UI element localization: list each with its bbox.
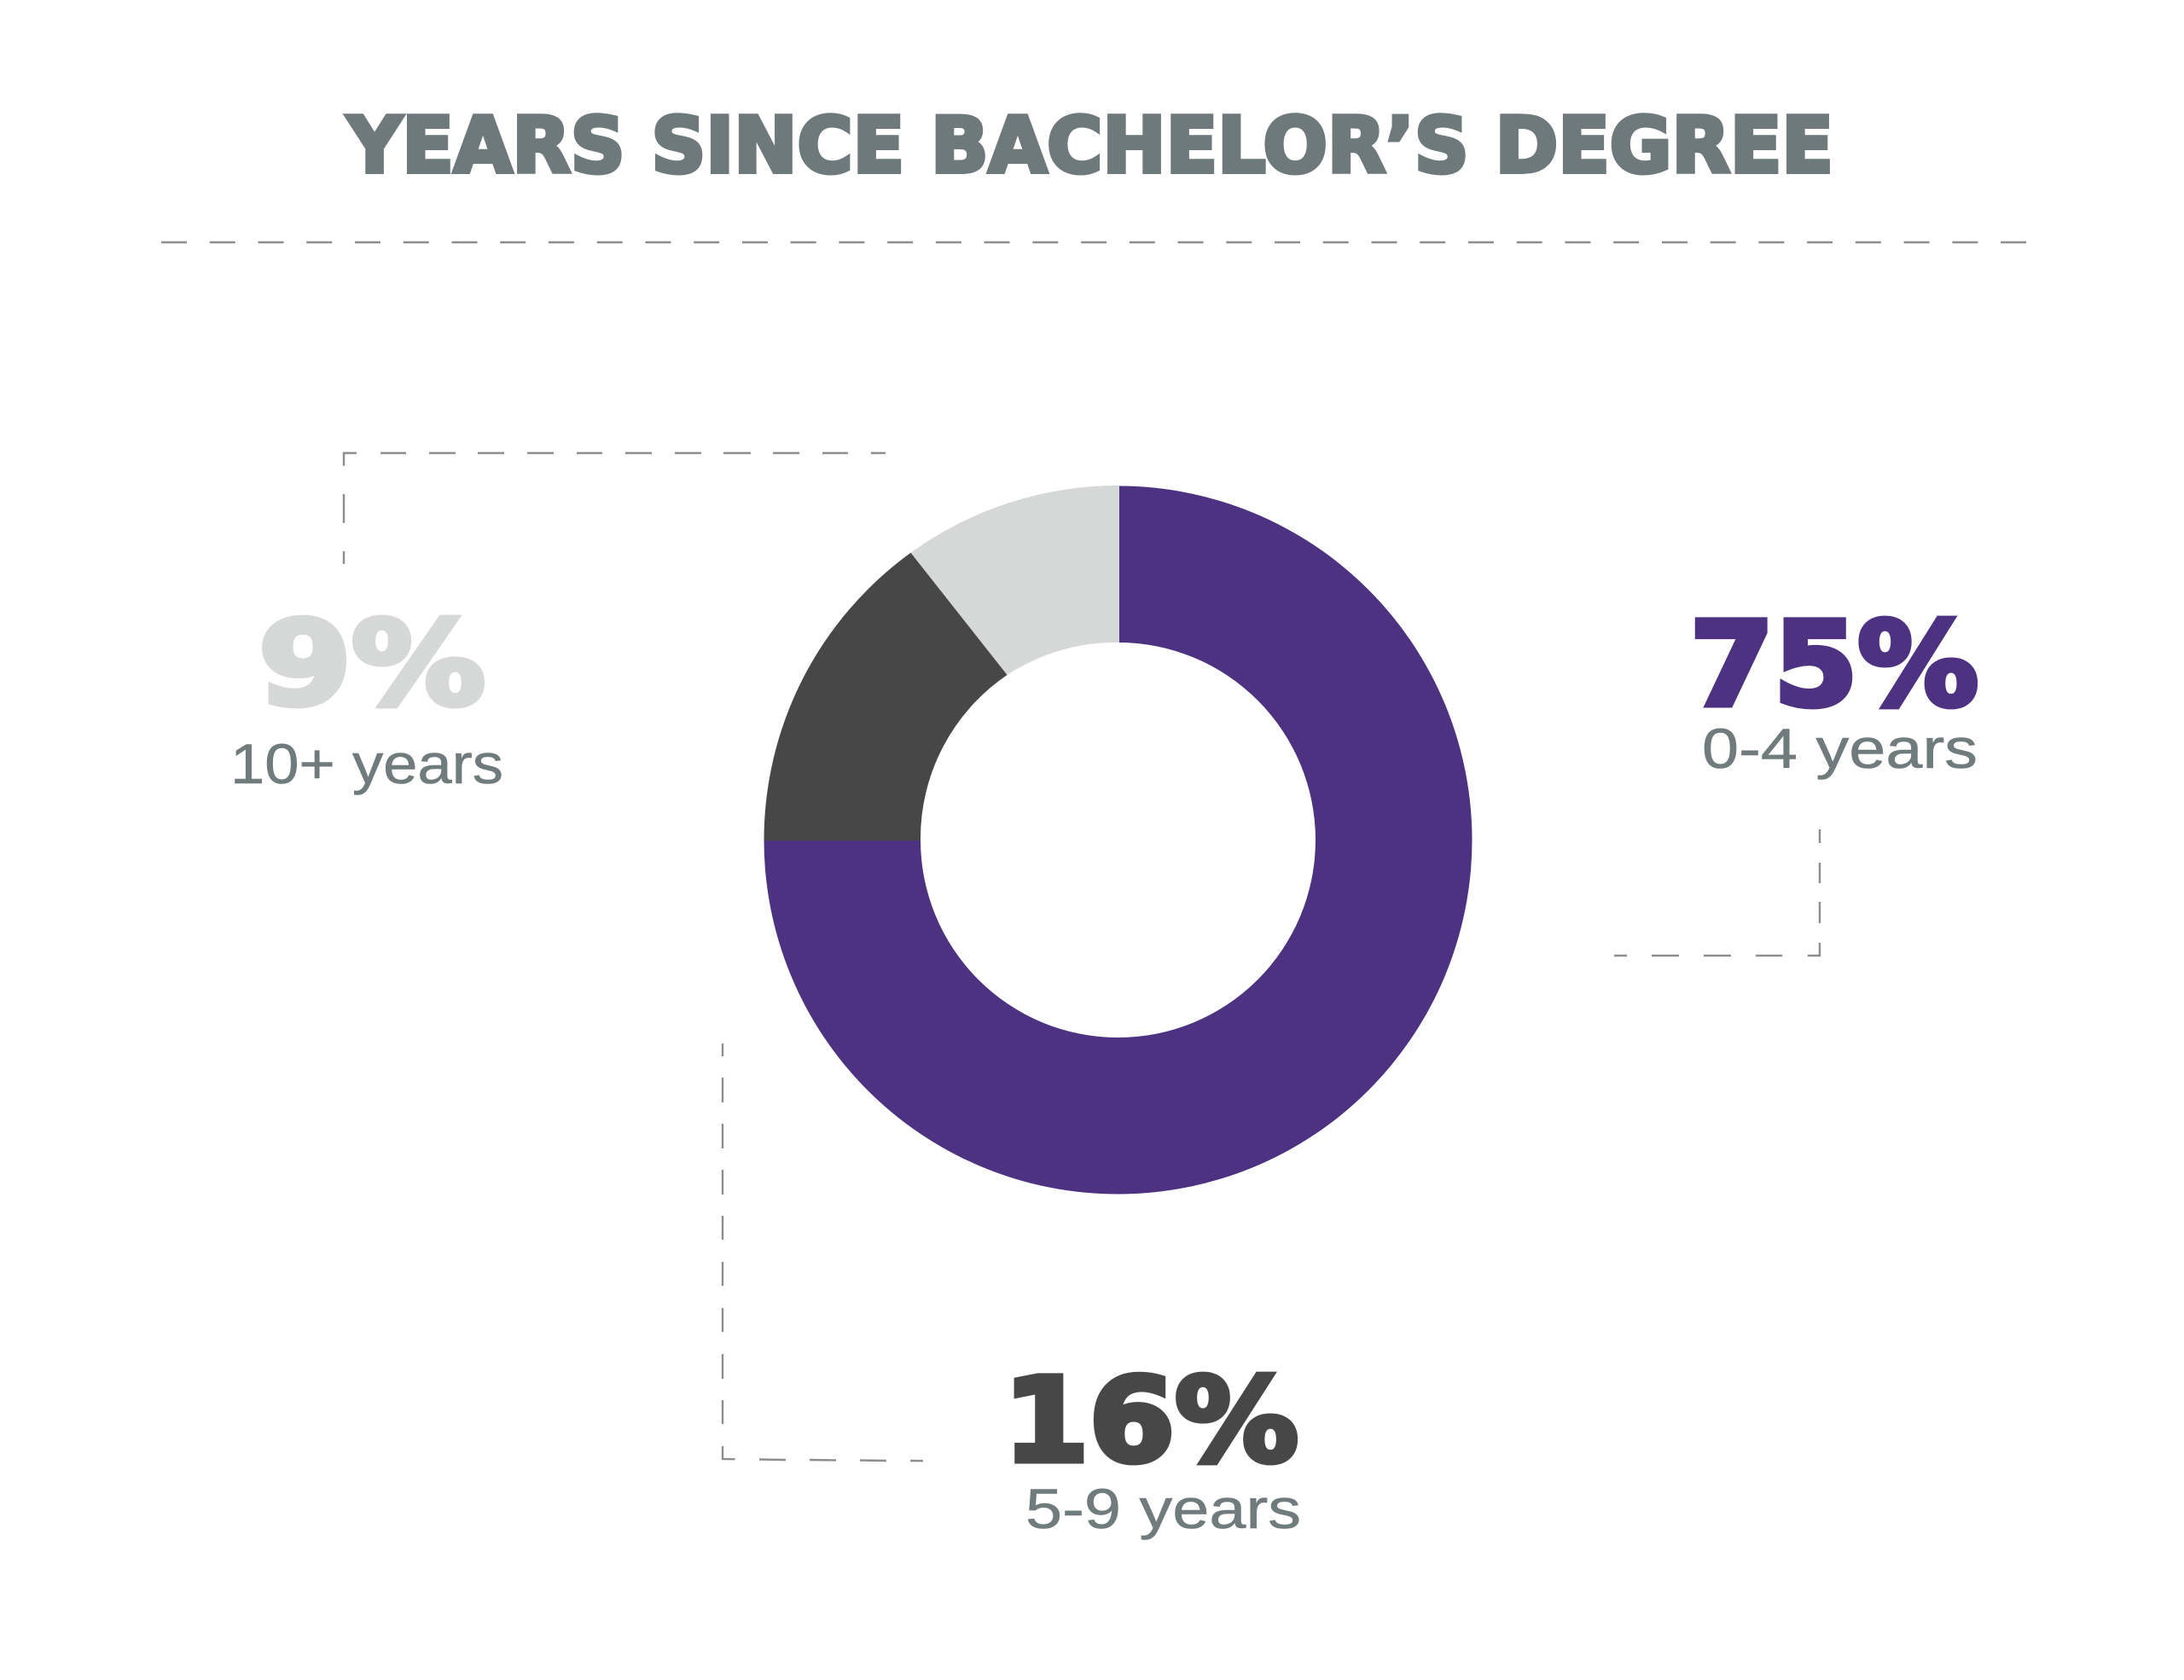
callout: 5-9 years	[723, 1043, 1301, 1540]
callout: 0-4 years	[1614, 598, 1978, 956]
segment: 0-4 years 75%	[764, 486, 1472, 1194]
label: 5-9 years: 5-9 years	[1025, 1477, 1301, 1540]
title: YEARS SINCE BACHELOR’S DEGREE	[346, 101, 1833, 191]
label: 0-4 years: 0-4 years	[1702, 717, 1978, 780]
donut chart	[764, 485, 1472, 1194]
stat: 9%: 9%	[258, 597, 485, 732]
segment: 5-9 years 16%	[764, 553, 1008, 840]
label: 10+ years: 10+ years	[230, 732, 503, 795]
stat: 75%: 75%	[1690, 598, 1978, 733]
segment: 10+ years 9%	[911, 485, 1119, 675]
stat: 16%: 16%	[1003, 1354, 1298, 1489]
callout: 10+ years	[230, 453, 886, 795]
